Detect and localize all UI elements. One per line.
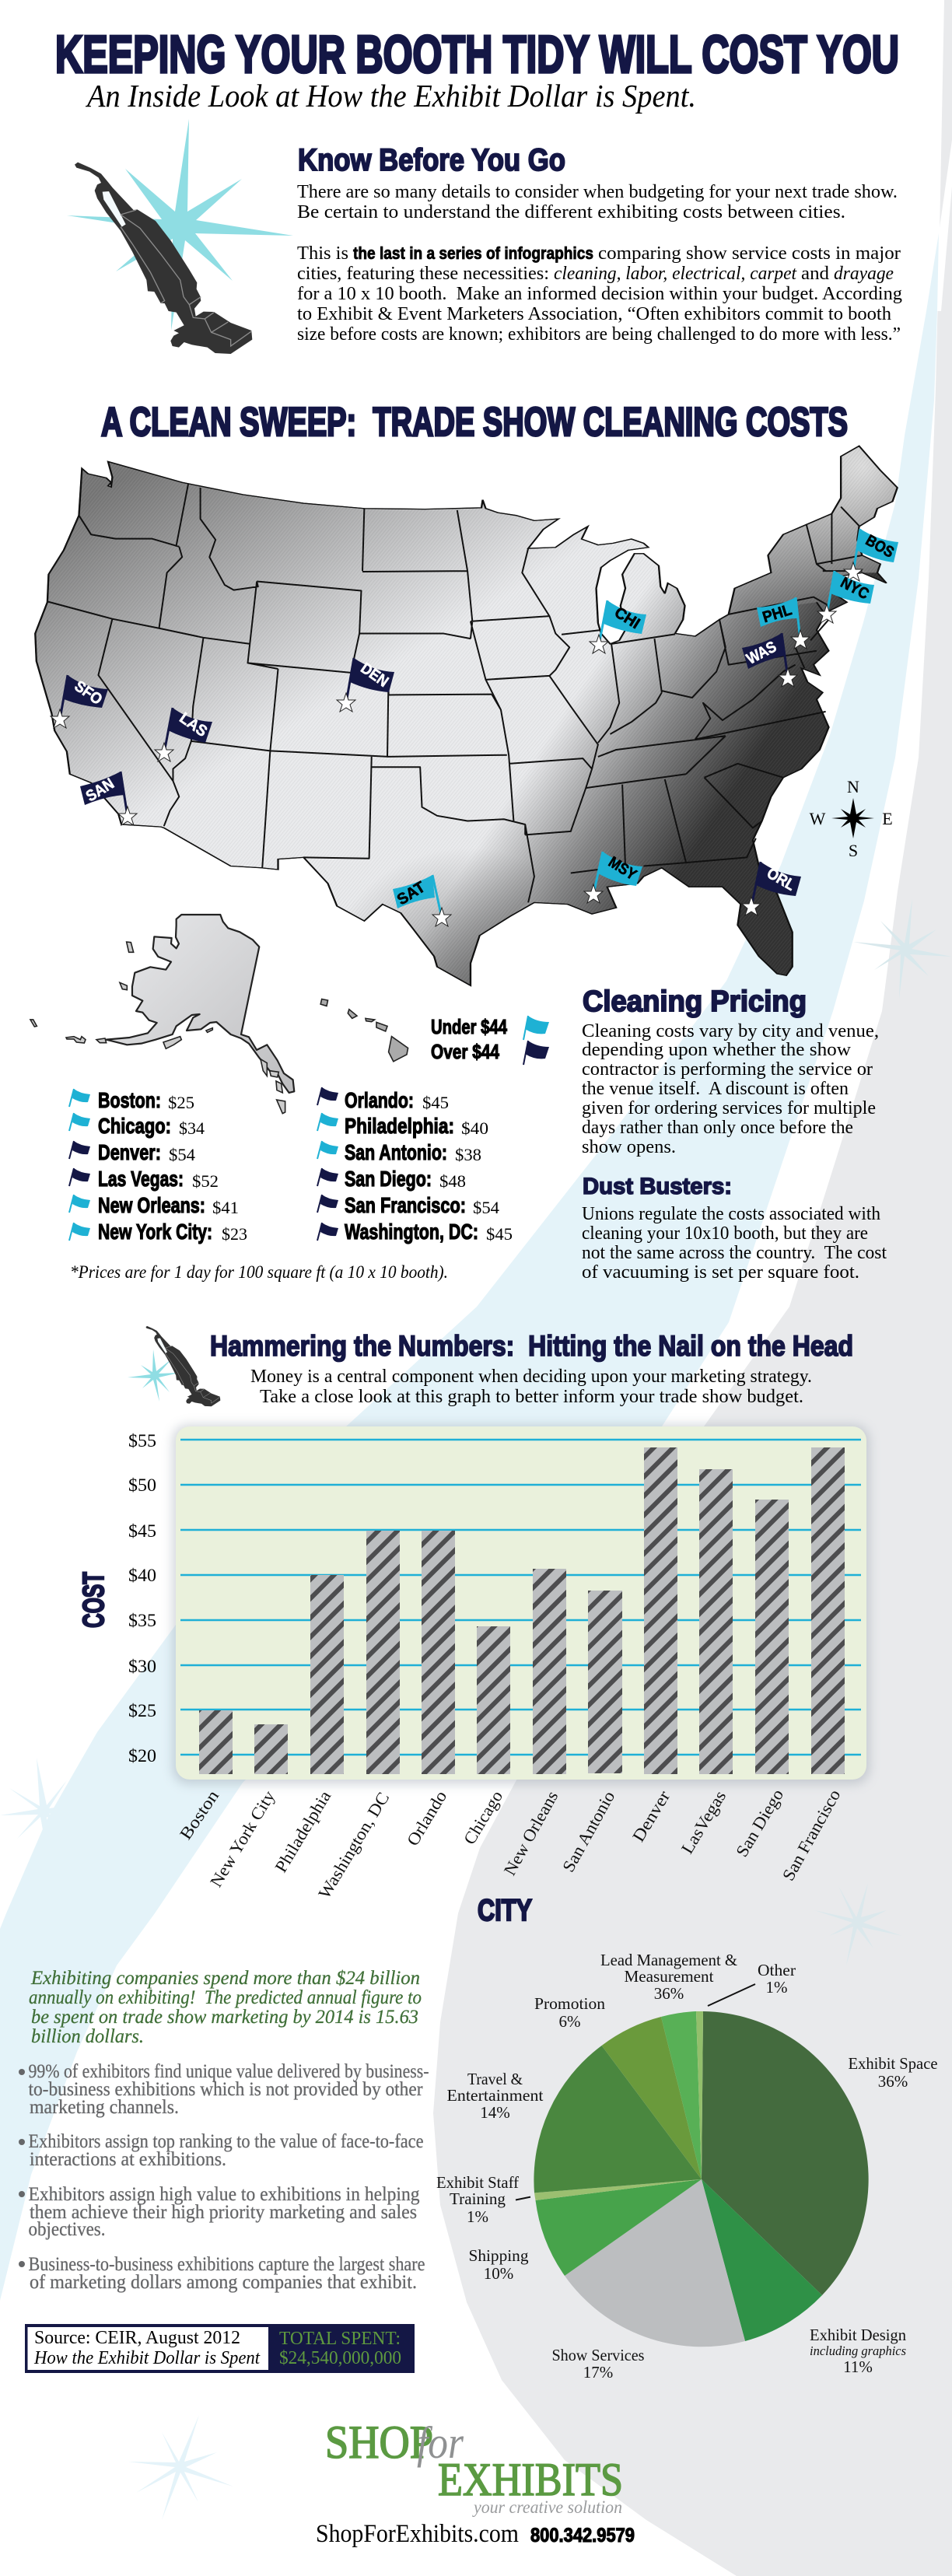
background: blue sweep: [0, 233, 939, 2301]
footer: web address: ShopForExhibits.com: [316, 2520, 519, 2548]
flag: SFO: [51, 675, 108, 728]
intro text block: [297, 182, 898, 222]
flag: WAS: WAS: [744, 639, 779, 668]
logo: Shop for Exhibits: for: [417, 2417, 464, 2468]
panel: dust busters: [582, 1174, 887, 1283]
bullet 3: Exhibitors assign high value to exhibitions in helping: [28, 2184, 420, 2205]
label: lead management: Lead Management &: [600, 1951, 737, 1969]
bullet 2: Exhibitors assign top ranking to the value of face-to-face: [28, 2131, 423, 2152]
item: Orlando: [317, 1087, 449, 1112]
bullet 1: 99% of exhibitors find unique value delivered by business-: [28, 2061, 429, 2082]
label: exhibit design: including graphics: [810, 2343, 906, 2358]
x axis labels: San Francisco: [778, 1786, 844, 1884]
text block: depending upon whether the show: [582, 1040, 852, 1060]
text block: Unions regulate the costs associated with: [582, 1204, 880, 1224]
item: Chicago: $34: [179, 1118, 205, 1138]
flag: NYC: [817, 571, 874, 623]
item: Denver: Denver:: [98, 1140, 161, 1164]
decorative star: left of chart: [0, 1758, 97, 1860]
item: San Diego: San Diego:: [345, 1167, 432, 1191]
text block: the venue itself. A discount is often: [582, 1079, 849, 1099]
slice: lead management: [661, 2011, 702, 2179]
legend: flag colours: [431, 1015, 549, 1065]
decorative star: footer: [128, 2415, 233, 2520]
flag: PHL: [757, 597, 810, 649]
decorative star: right of map: [853, 898, 952, 999]
bullet 4: of marketing dollars among companies that exhibit.: [30, 2272, 417, 2293]
map: continental US: [35, 446, 898, 985]
slice: promotion: [602, 2017, 702, 2179]
x axis labels: LasVegas: [677, 1787, 730, 1857]
label: shipping: [468, 2246, 529, 2283]
heading: Dust Busters:: [583, 1174, 732, 1199]
logo: Shop for Exhibits: SHOP: [325, 2417, 433, 2468]
label: exhibit space: [848, 2054, 938, 2091]
x axis labels: [176, 1786, 844, 1902]
label: exhibit staff training: Training: [450, 2189, 506, 2208]
bars: [199, 1447, 845, 1774]
label: lead management: [600, 1951, 737, 2003]
item: Denver: $54: [169, 1145, 195, 1164]
label: lead management: Measurement: [624, 1967, 714, 1986]
intro text block: Be certain to understand the different exhibiting costs between cities.: [297, 202, 845, 222]
callout: green statistic text: annually on exhibiting! The predicted annual figure to: [29, 1987, 422, 2008]
bullet 3: [19, 2184, 420, 2240]
flag: PHL: PHL: [761, 601, 794, 626]
text block: [582, 1021, 879, 1157]
item: San Antonio: San Antonio:: [345, 1140, 447, 1164]
compass: E: [882, 809, 893, 828]
bullet 2: [19, 2131, 423, 2170]
label: exhibit design: 11%: [843, 2357, 873, 2376]
body text block: size before costs are known; exhibitors are being challenged to do more with less.”: [297, 324, 901, 345]
body text block: cities, featuring these necessities:: [297, 264, 549, 284]
flag: BOS: BOS: [863, 532, 897, 562]
flag: SAN: [80, 772, 137, 825]
decorative star: above pie: [814, 1883, 902, 1965]
flag: SFO: SFO: [72, 677, 105, 709]
bullet 1: marketing channels.: [30, 2097, 179, 2118]
icon: vacuum with sparkle: [67, 119, 293, 354]
flag: DEN: DEN: [358, 660, 391, 691]
item: San Francisco: $54: [473, 1198, 499, 1217]
slice: other: [696, 2011, 703, 2179]
callout: green statistic text: [29, 1968, 422, 2047]
text block: contractor is performing the service or: [582, 1059, 873, 1080]
y axis labels: $55: [128, 1431, 156, 1451]
item: New Orleans: $41: [212, 1198, 239, 1217]
flag: CHI: [590, 600, 646, 653]
heading: Know Before You Go: [298, 143, 565, 177]
list: city prices column 2: [317, 1087, 513, 1244]
source box: [25, 2324, 415, 2373]
intro text block: There are so many details to consider when budgeting for your next trade show.: [297, 182, 898, 202]
chart intro text: Take a close look at this graph to better inform your trade show budget.: [260, 1387, 803, 1407]
item: New Orleans: New Orleans:: [98, 1193, 205, 1217]
slice: show services: [565, 2179, 745, 2347]
body text block: comparing show service costs in major: [598, 243, 901, 264]
flag: MSY: MSY: [605, 854, 640, 884]
callout: green statistic text: Exhibiting companies spend more than $24 billion: [30, 1968, 420, 1989]
bullet 4: Business-to-business exhibitions capture the largest share: [28, 2254, 425, 2275]
logo: Shop for Exhibits: [325, 2417, 623, 2517]
y axis labels: $45: [128, 1521, 156, 1541]
label: exhibit design: Exhibit Design: [810, 2326, 906, 2344]
item: New York City: $23: [222, 1224, 247, 1244]
source box: How the Exhibit Dollar is Spent: [33, 2348, 261, 2368]
body text block: to Exhibit & Event Marketers Association, “Often exhibitors commit to booth: [297, 304, 891, 324]
pie chart: [534, 2011, 869, 2347]
item: Philadelphia: Philadelphia:: [345, 1114, 454, 1138]
y axis labels: $25: [128, 1701, 156, 1720]
flag: MSY: [584, 852, 642, 903]
callout: green statistic text: billion dollars.: [31, 2026, 144, 2047]
text block: of vacuuming is set per square foot.: [582, 1262, 859, 1283]
slice: shipping: [535, 2179, 702, 2276]
text block: [582, 1204, 887, 1283]
body text block: the last in a series of infographics: [353, 243, 593, 263]
item: San Francisco: San Francisco:: [345, 1193, 466, 1217]
slice: travel and entertainment: [534, 2046, 702, 2193]
flag: ORL: ORL: [764, 865, 798, 894]
item: Las Vegas: $52: [192, 1171, 219, 1191]
item: Chicago: Chicago:: [98, 1114, 171, 1138]
legend: flag colours: Over $44: [431, 1040, 499, 1063]
label: promotion: [534, 1994, 606, 2031]
slice: exhibit space: [702, 2011, 869, 2295]
x axis labels: New Orleans: [499, 1787, 562, 1878]
bullet 2: interactions at exhibitions.: [30, 2149, 226, 2170]
label: exhibit space: 36%: [878, 2072, 908, 2091]
label: other: 1%: [765, 1978, 787, 1997]
body text block: drayage: [834, 264, 894, 284]
flag: WAS: [742, 633, 797, 687]
item: Boston: $25: [168, 1093, 194, 1112]
item: Orlando: Orlando:: [345, 1088, 414, 1112]
callout: green statistic text: be spent on trade show marketing by 2014 is 15.63: [31, 2007, 418, 2028]
y axis labels: $30: [128, 1657, 156, 1676]
bullet 1: to-business exhibitions which is not provided by other: [28, 2079, 423, 2100]
text block: given for ordering services for multiple: [582, 1098, 876, 1118]
x axis labels: Orlando: [403, 1787, 450, 1849]
y axis labels: $50: [128, 1475, 156, 1495]
label: lead management: 36%: [654, 1984, 684, 2003]
item: San Antonio: $38: [455, 1145, 481, 1164]
x axis labels: New York City: [206, 1787, 278, 1891]
map: Alaska: [30, 915, 294, 1114]
bullet 3: them achieve their high priority marketing and sales: [30, 2202, 417, 2223]
label: show services: Show Services: [552, 2346, 644, 2364]
flag: SAT: [393, 875, 451, 926]
label: travel and entertainment: 14%: [480, 2103, 510, 2122]
label: shipping: 10%: [484, 2264, 513, 2283]
map: Hawaii: [320, 999, 408, 1062]
slice: exhibit design: [702, 2179, 822, 2341]
y axis labels: $40: [128, 1566, 156, 1585]
text block: cleaning your 10x10 booth, but they are: [582, 1223, 868, 1244]
chart intro text: Money is a central component when deciding upon your marketing strategy.: [250, 1367, 812, 1387]
compass: [810, 777, 893, 860]
footer: phone number: 800.342.9579: [530, 2525, 635, 2546]
x axis labels: Denver: [628, 1787, 674, 1845]
label: travel and entertainment: Entertainment: [446, 2086, 544, 2105]
flag: SAN: SAN: [83, 775, 117, 805]
source box: Source: CEIR, August 2012: [34, 2328, 240, 2348]
item: Las Vegas: Las Vegas:: [98, 1167, 184, 1191]
pie labels: [436, 1951, 938, 2382]
bullet 3: objectives.: [28, 2219, 106, 2240]
item: Denver: [69, 1140, 195, 1164]
item: Boston: [69, 1088, 194, 1112]
slice: exhibit staff training: [534, 2179, 702, 2200]
source box: TOTAL SPENT:: [279, 2329, 401, 2349]
body text block: [297, 243, 902, 345]
flag: NYC: NYC: [838, 574, 872, 603]
subtitle: An Inside Look at How the Exhibit Dollar is Spent.: [85, 78, 696, 114]
flag: CHI: CHI: [611, 604, 642, 632]
text block: days rather than only once before the: [582, 1118, 853, 1138]
text block: show opens.: [582, 1137, 676, 1157]
item: Chicago: [69, 1113, 205, 1138]
label: travel and entertainment: [446, 2070, 544, 2122]
flag: LAS: LAS: [177, 709, 210, 740]
flag: DEN: [337, 658, 394, 712]
item: New York City: New York City:: [98, 1220, 212, 1244]
label: other: [708, 1961, 796, 2006]
label: show services: 17%: [583, 2363, 613, 2382]
item: Boston: Boston:: [98, 1088, 161, 1112]
item: Washington, DC: Washington, DC:: [345, 1220, 478, 1244]
label: exhibit staff training: [436, 2173, 530, 2226]
label: exhibit space: Exhibit Space: [848, 2054, 938, 2073]
label: shipping: Shipping: [468, 2246, 529, 2265]
icon: small vacuum with sparkle: [128, 1326, 220, 1406]
grid lines: [180, 1440, 861, 1755]
legend: flag colours: Under $44: [431, 1015, 507, 1038]
y axis labels: $35: [128, 1611, 156, 1630]
flag: LAS: [155, 708, 212, 761]
label: exhibit design: [810, 2326, 906, 2376]
logo: Shop for Exhibits: your creative solution: [472, 2497, 622, 2517]
label: promotion: Promotion: [534, 1994, 606, 2013]
body text block: This is: [297, 243, 348, 264]
flag: ORL: [742, 862, 801, 915]
text block: Cleaning costs vary by city and venue,: [582, 1021, 879, 1041]
label: other: Other: [758, 1961, 796, 1979]
item: Washington, DC: $45: [486, 1224, 513, 1244]
label: promotion: 6%: [558, 2012, 580, 2031]
label: show services: [552, 2346, 644, 2382]
bar chart: [78, 1425, 870, 1927]
body text block: cleaning, labor, electrical, carpet: [554, 264, 797, 284]
bullet 1: [19, 2061, 429, 2118]
x axis labels: Chicago: [460, 1787, 506, 1848]
label: travel and entertainment: Travel &: [467, 2070, 523, 2088]
y axis labels: [128, 1431, 156, 1766]
background: white sliver: [937, 140, 952, 311]
x axis labels: Philadelphia: [271, 1787, 334, 1876]
chart intro text: [250, 1367, 812, 1407]
x axis title: CITY: [478, 1894, 532, 1927]
x axis labels: Boston: [176, 1787, 222, 1843]
label: exhibit staff training: Exhibit Staff: [436, 2173, 519, 2192]
logo: Shop for Exhibits: EXHIBITS: [438, 2454, 623, 2505]
chart panel: [173, 1425, 870, 1784]
heading: hammering the numbers: Hammering the Numbers: Hitting the Nail on the Head: [210, 1330, 853, 1362]
x axis labels: Washington, DC: [314, 1789, 393, 1902]
compass: N: [847, 777, 859, 796]
source box: $24,540,000,000: [279, 2348, 401, 2368]
x axis labels: San Antonio: [558, 1787, 618, 1875]
flag: BOS: [844, 529, 898, 581]
item: San Diego: $48: [439, 1171, 466, 1191]
flag: SAT: SAT: [394, 879, 429, 908]
text block: not the same across the country. The cost: [582, 1243, 887, 1263]
item: Orlando: $45: [422, 1093, 449, 1112]
item: Philadelphia: $40: [461, 1118, 488, 1138]
panel: cleaning pricing: [582, 985, 879, 1157]
background: grey sweep: [433, 0, 952, 2576]
list: exhibition bullets: [19, 2061, 429, 2293]
y axis labels: $20: [128, 1746, 156, 1766]
label: exhibit staff training: 1%: [467, 2207, 488, 2226]
x axis labels: San Diego: [732, 1786, 787, 1860]
panel: know before you go: [297, 143, 902, 345]
list: city prices column 1: [69, 1088, 247, 1244]
heading: Cleaning Pricing: [583, 985, 807, 1018]
y axis title: COST: [78, 1572, 110, 1628]
compass: S: [849, 841, 858, 860]
bullet 4: [19, 2254, 425, 2293]
body text block: and: [801, 264, 829, 284]
footnote: *Prices are for 1 day for 100 square ft (a 10 x 10 booth).: [70, 1262, 448, 1282]
body text block: for a 10 x 10 booth. Make an informed decision within your budget. According: [297, 284, 902, 304]
compass: W: [810, 809, 826, 828]
